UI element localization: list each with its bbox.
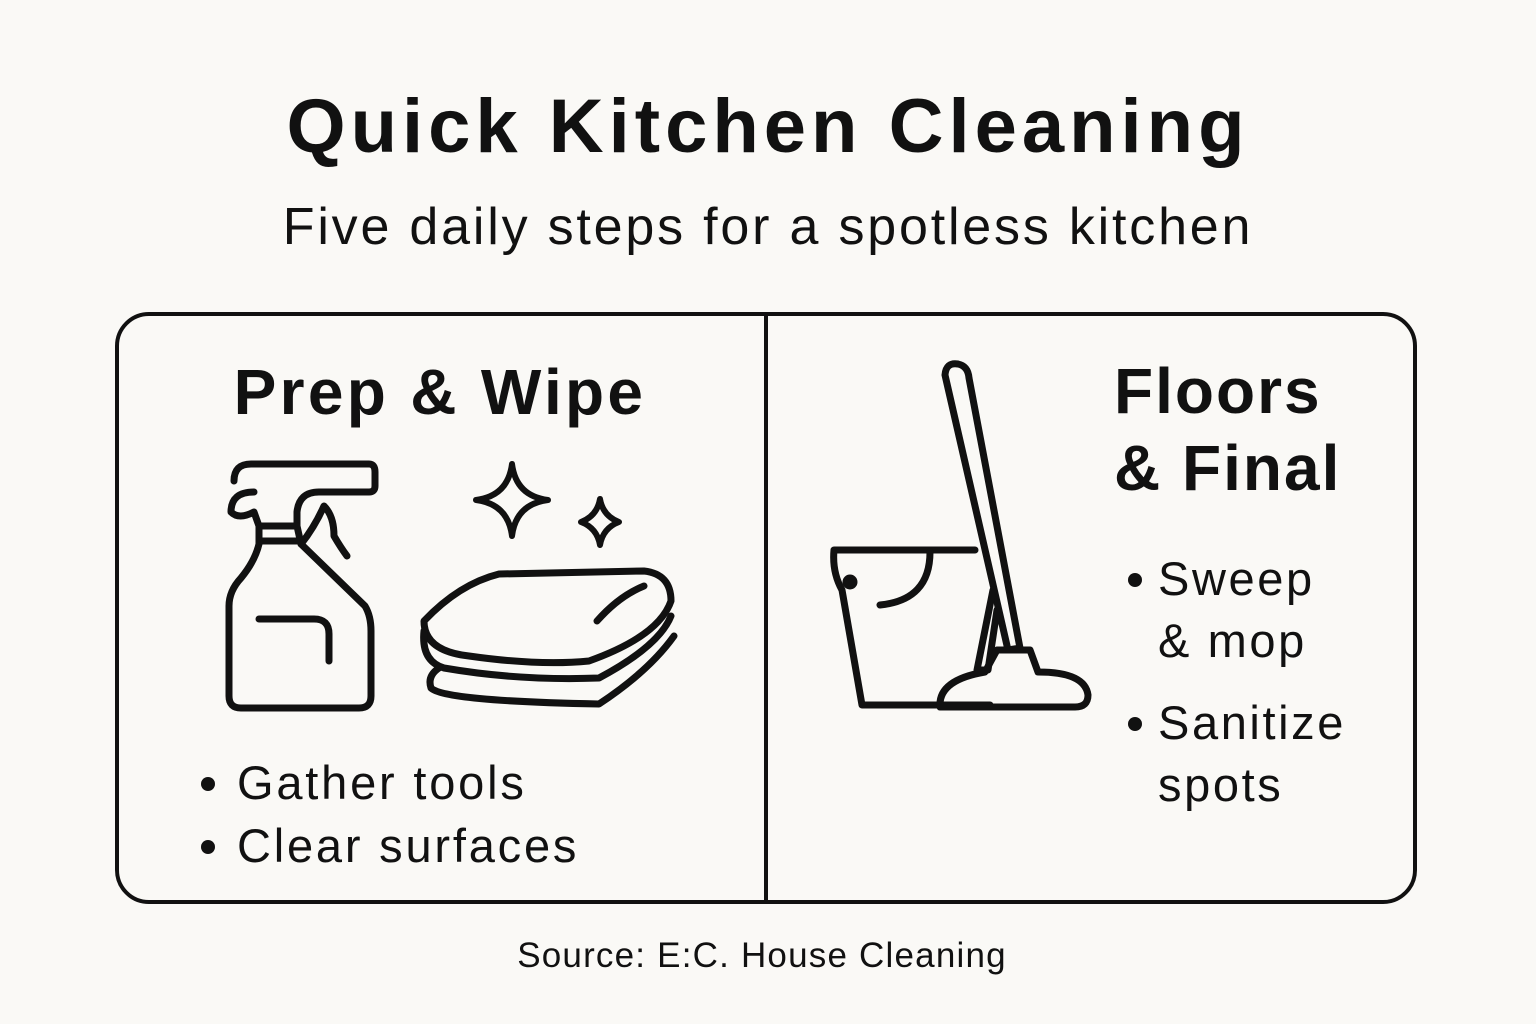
icon: bucket and mop	[830, 360, 1092, 710]
heading: floors & final: Floors	[1114, 355, 1322, 427]
heading: floors & final: & Final	[1114, 432, 1341, 504]
heading: floors & final	[1114, 355, 1341, 504]
icon: sparkles	[473, 461, 622, 548]
icon: cloths	[420, 568, 678, 708]
bullet: sweep & mop: Sweep	[1158, 552, 1315, 605]
bullet: sanitize spots	[1128, 696, 1346, 811]
bullet list: prep	[201, 756, 579, 872]
bullet: clear surfaces: Clear surfaces	[237, 819, 579, 872]
bullet: gather tools: Gather tools	[237, 756, 527, 809]
bullet: sanitize spots: spots	[1158, 758, 1283, 811]
panel: prep & wipe	[201, 356, 678, 872]
icon: spray bottle	[226, 460, 378, 712]
source: Source: E:C. House Cleaning	[517, 936, 1007, 975]
bullet list: floors	[1128, 552, 1346, 811]
heading: prep & wipe: Prep & Wipe	[234, 356, 646, 428]
panel: floors & final	[830, 355, 1346, 811]
bullet: sweep & mop: & mop	[1158, 614, 1307, 667]
title: Quick Kitchen Cleaning	[286, 84, 1250, 169]
bullet: sweep & mop	[1128, 552, 1315, 667]
bullet: sanitize spots: Sanitize	[1158, 696, 1346, 749]
subtitle: Five daily steps for a spotless kitchen	[283, 198, 1253, 256]
